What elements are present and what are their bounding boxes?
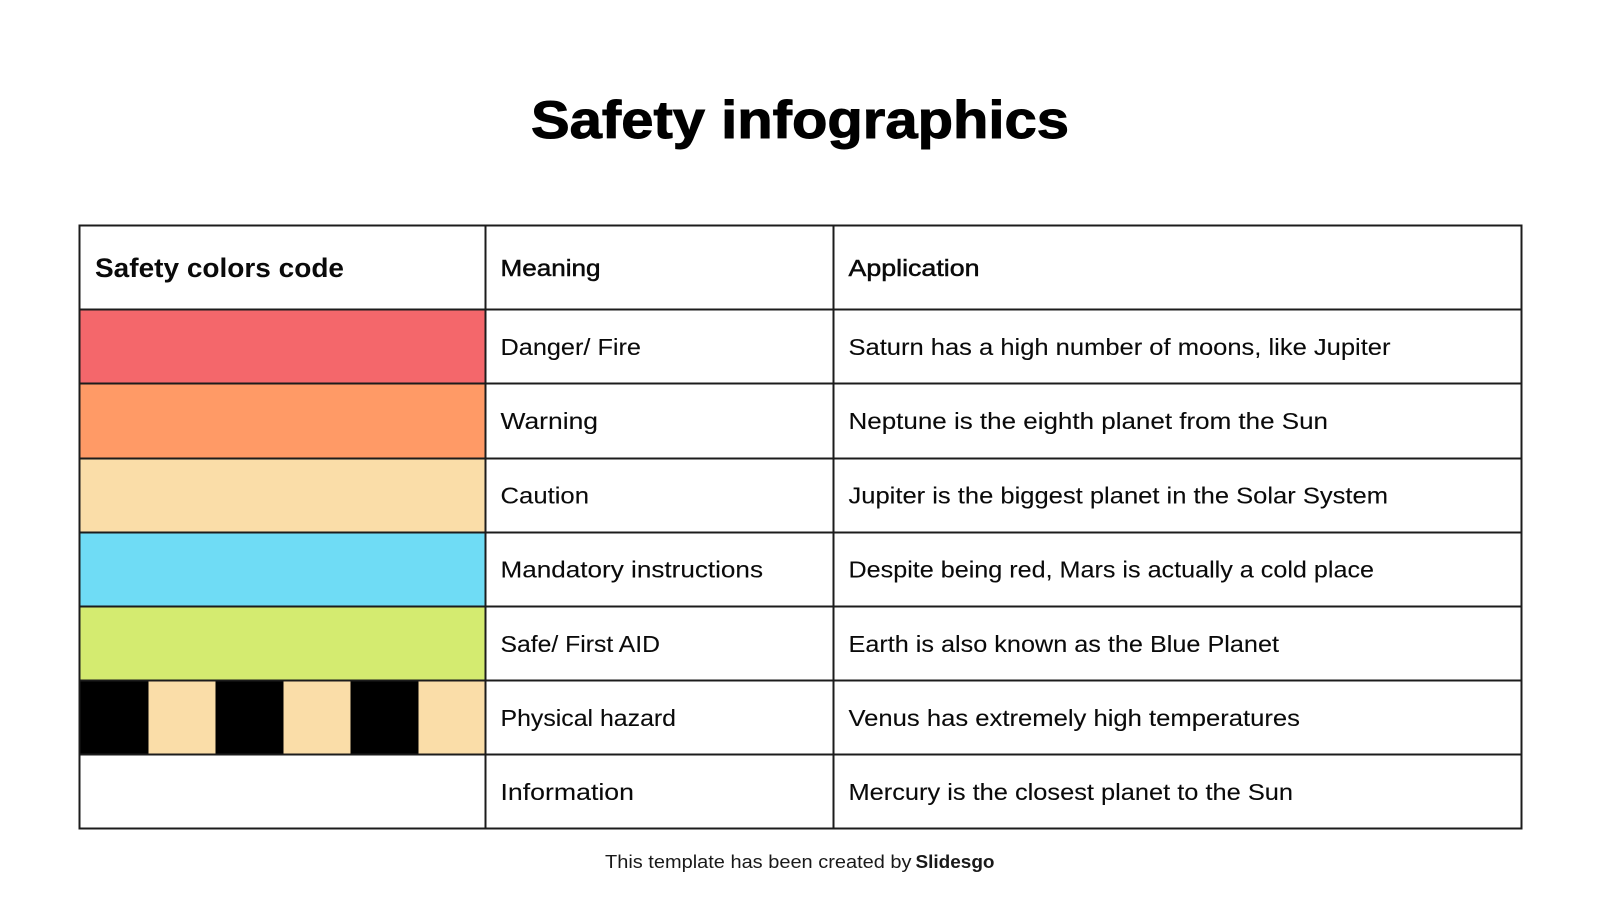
title: Safety infographics <box>531 91 1069 150</box>
swatch: white <box>80 754 486 828</box>
meaning: caution: Caution <box>500 482 589 508</box>
swatch: tan <box>80 458 486 532</box>
footer credit: This template has been created by <box>605 852 912 872</box>
row: caution <box>80 458 1388 532</box>
swatch: red <box>80 309 486 384</box>
application: warning: Neptune is the eighth planet from the Sun <box>848 408 1328 434</box>
meaning: warning: Warning <box>500 408 598 434</box>
swatch: black and tan stripes <box>80 680 486 754</box>
application: safe: Earth is also known as the Blue Planet <box>848 631 1280 657</box>
row: information <box>80 754 1293 828</box>
application: danger: Saturn has a high number of moons, like Jupiter <box>848 334 1391 360</box>
row: danger <box>80 309 1391 384</box>
row: warning <box>80 384 1328 458</box>
header row <box>95 253 980 283</box>
row: mandatory instructions <box>80 532 1374 606</box>
heading: application: Application <box>848 255 980 281</box>
application: caution: Jupiter is the biggest planet in the Solar System <box>848 482 1388 508</box>
application: mandatory instructions: Despite being red, Mars is actually a cold place <box>848 556 1374 582</box>
application: physical hazard: Venus has extremely high temperatures <box>848 705 1300 731</box>
panel: safety colors table <box>80 226 1522 828</box>
swatch: blue <box>80 532 486 606</box>
footer credit: Slidesgo <box>916 852 995 872</box>
heading: safety colors code: Safety colors code <box>95 253 344 283</box>
meaning: mandatory instructions: Mandatory instructions <box>500 556 763 582</box>
heading: meaning: Meaning <box>500 255 600 281</box>
meaning: physical hazard: Physical hazard <box>500 705 676 731</box>
application: information: Mercury is the closest planet to the Sun <box>848 779 1293 805</box>
meaning: danger: Danger/ Fire <box>500 334 641 360</box>
row: safe <box>80 606 1280 680</box>
meaning: safe: Safe/ First AID <box>500 631 660 657</box>
swatch: orange <box>80 384 486 458</box>
row: physical hazard <box>80 680 1300 754</box>
meaning: information: Information <box>500 779 634 805</box>
swatch: green <box>80 606 486 680</box>
